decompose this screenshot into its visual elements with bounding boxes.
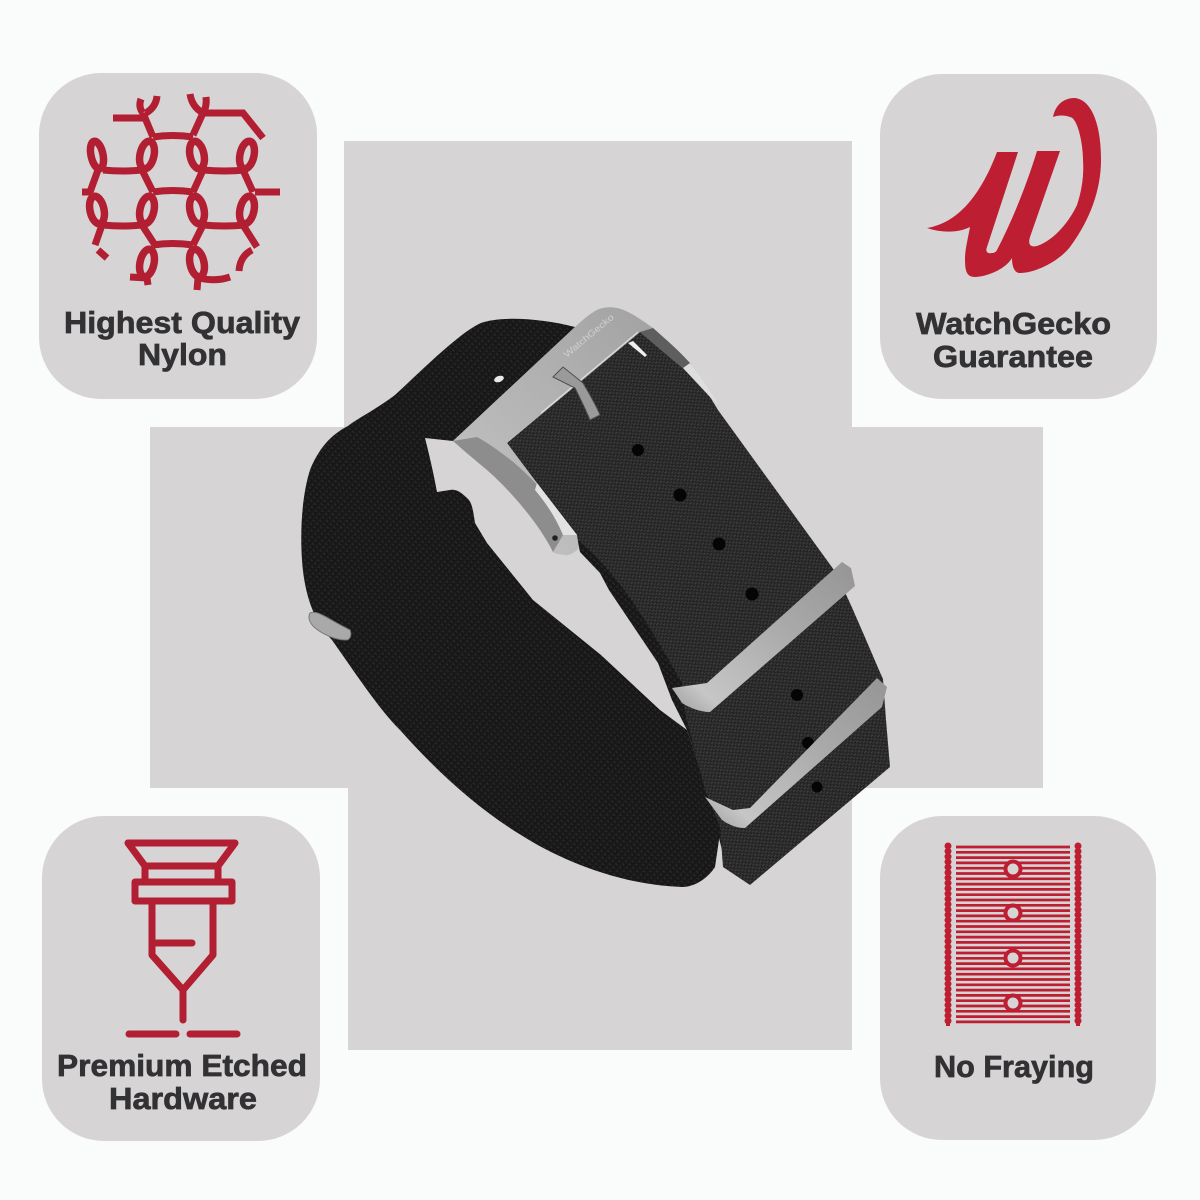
- buckle arm highlight: [535, 483, 577, 535]
- buckle window edge: [541, 332, 638, 413]
- strap: adjustment holes: [632, 444, 822, 792]
- card: premium etched hardware: [42, 816, 320, 1141]
- hardware: buckle tongue: [553, 367, 600, 420]
- hardware: upper keeper: [672, 562, 855, 712]
- white halo behind top-left card: [0, 0, 343, 427]
- card: no fraying: [880, 816, 1156, 1140]
- buckle right arm shading: [640, 328, 710, 397]
- card: watchgecko guarantee: [880, 74, 1157, 399]
- strap: rear fold layer: [577, 538, 740, 860]
- strap: front panel with holes: [507, 332, 890, 885]
- hardware: lower keeper: [705, 678, 887, 828]
- heading: premium etched hardware: Premium Etched: [57, 1048, 307, 1083]
- heading: premium etched hardware: [57, 1048, 307, 1116]
- heading: watchgecko guarantee: [916, 306, 1111, 374]
- buckle engraved brand: WatchGecko: [562, 312, 616, 360]
- icon: W logo: [927, 98, 1101, 277]
- white halo behind top-right card: [852, 0, 1200, 427]
- card: highest quality nylon: [39, 73, 317, 399]
- central grey cross backdrop: [150, 141, 1043, 1050]
- strap: small gap near buckle: [493, 374, 505, 384]
- hardware: buckle pin: [552, 535, 558, 541]
- hardware: buckle frame: [453, 307, 720, 555]
- white halo behind bottom-right card: [852, 788, 1200, 1200]
- strap: wrist loop: [301, 319, 720, 887]
- white halo behind bottom-left card: [0, 788, 348, 1200]
- buckle window gap: [628, 341, 647, 357]
- hardware: left keeper: [309, 612, 351, 640]
- buckle right arm highlight: [683, 363, 720, 407]
- heading: watchgecko guarantee: WatchGecko: [916, 306, 1111, 341]
- product photo: black nylon watch strap: [301, 307, 890, 887]
- icon: laser etching head: [128, 843, 237, 1034]
- heading: no fraying: No Fraying: [934, 1049, 1094, 1084]
- icon: strap weave with holes: [948, 846, 1078, 1026]
- icon: woven nylon net: [82, 94, 280, 290]
- heading: highest quality nylon: Nylon: [138, 337, 227, 372]
- buckle lower arm shading: [453, 437, 563, 552]
- heading: highest quality nylon: [64, 305, 301, 372]
- heading: highest quality nylon: Highest Quality: [64, 305, 301, 340]
- heading: premium etched hardware: Hardware: [109, 1081, 257, 1116]
- heading: watchgecko guarantee: Guarantee: [933, 339, 1093, 374]
